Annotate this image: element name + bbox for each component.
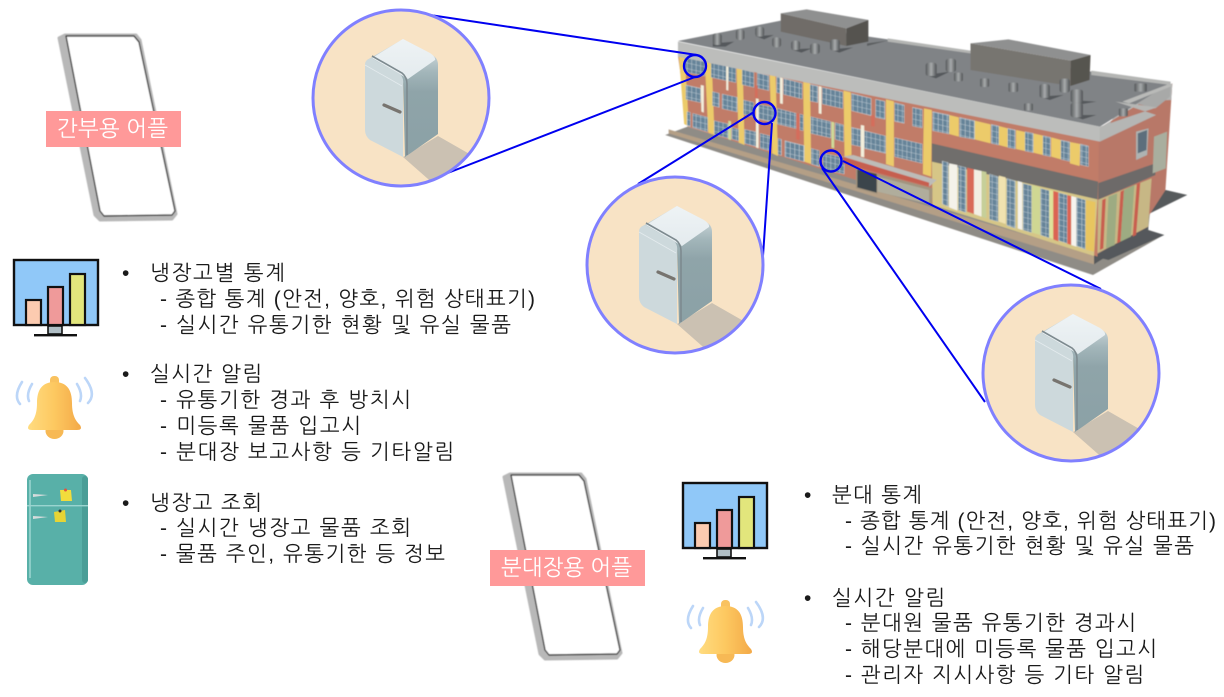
text block: squad statistics: - 종합 통계 (안전, 양호, 위험 상태표기)	[845, 510, 1216, 533]
roof	[678, 21, 1171, 127]
text block: realtime alerts right: - 해당분대에 미등록 물품 입고시	[845, 638, 1157, 661]
text block: fridge lookup	[122, 492, 445, 566]
text block: squad statistics: 분대 통계	[832, 484, 922, 507]
entrance	[856, 168, 933, 205]
text block: realtime alerts right	[804, 587, 1157, 687]
text block: squad statistics: - 실시간 유통기한 현황 및 유실 물품	[845, 535, 1194, 558]
text block: realtime alerts right: - 분대원 물품 유통기한 경과시	[845, 612, 1136, 635]
label: officer app	[46, 111, 181, 147]
icon: bell right	[688, 600, 763, 663]
text block: fridge lookup: •	[122, 492, 129, 515]
text block: fridge statistics: - 종합 통계 (안전, 양호, 위험 상태표기)	[160, 288, 535, 311]
text block: realtime alerts right: - 관리자 지시사항 등 기타 알림	[845, 664, 1144, 687]
magnifier rings	[313, 10, 1159, 461]
icon: monitor chart left	[14, 260, 98, 336]
text block: fridge lookup: 냉장고 조회	[150, 492, 262, 515]
text block: squad statistics: •	[804, 484, 811, 507]
icon: bell left	[17, 376, 92, 439]
phone: squad leader app	[504, 474, 621, 659]
text block: fridge statistics: - 실시간 유통기한 현황 및 유실 물품	[160, 314, 511, 337]
connector lines and building markers	[430, 15, 1101, 402]
text block: squad statistics	[804, 484, 1216, 558]
vents	[713, 27, 1147, 117]
parapet	[678, 42, 1100, 142]
phone: officer app	[59, 35, 176, 220]
magnifier circle 1 with fridge	[313, 10, 489, 186]
text block: realtime alerts right: •	[804, 587, 811, 610]
text block: realtime alerts left: 실시간 알림	[150, 363, 262, 386]
icon: monitor chart right	[683, 483, 767, 559]
icon: teal fridge	[27, 474, 88, 585]
text block: fridge lookup: - 실시간 냉장고 물품 조회	[160, 517, 411, 540]
vent shadows	[713, 35, 1096, 119]
front facade	[678, 55, 1099, 257]
magnifier circle 3 with fridge	[983, 285, 1159, 461]
text block: realtime alerts left: - 미등록 물품 입고시	[160, 415, 361, 438]
magnifier circle 2 with fridge	[587, 177, 763, 353]
colored stripes ground floor	[949, 163, 1095, 252]
text block: fridge statistics: •	[122, 262, 129, 285]
text block: realtime alerts left	[122, 363, 454, 464]
text block: realtime alerts left: •	[122, 363, 129, 386]
text block: realtime alerts right: 실시간 알림	[832, 587, 945, 610]
text block: fridge statistics: 냉장고별 통계	[150, 262, 285, 285]
text block: fridge statistics	[122, 262, 535, 337]
text block: realtime alerts left: - 유통기한 경과 후 방치시	[160, 389, 411, 412]
dark band ground floor	[932, 143, 1098, 201]
text block: fridge lookup: - 물품 주인, 유통기한 등 정보	[160, 543, 445, 566]
right wall	[1095, 83, 1172, 255]
windows	[685, 57, 1088, 249]
label: squad leader app: 분대장용 어플	[501, 555, 632, 580]
text block: realtime alerts left: - 분대장 보고사항 등 기타알림	[160, 441, 454, 464]
roof units	[781, 9, 869, 28]
accent strips	[701, 66, 864, 157]
label: squad leader app	[490, 550, 645, 586]
yellow stripes	[679, 57, 1080, 177]
label: officer app: 간부용 어플	[57, 116, 168, 141]
building illustration	[665, 9, 1187, 275]
